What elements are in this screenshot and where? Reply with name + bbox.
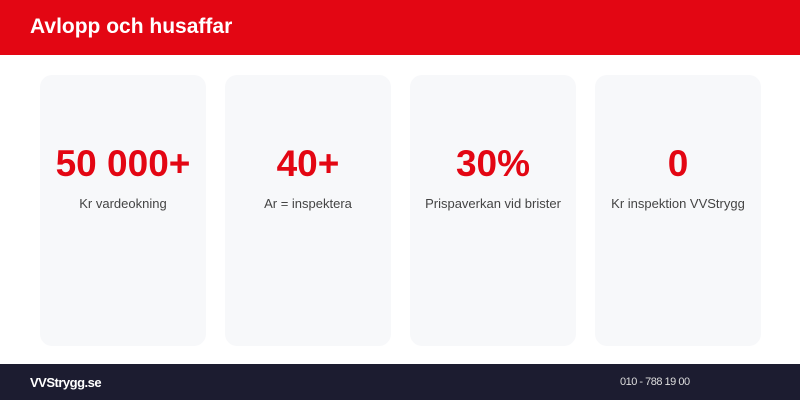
card: years: 40+ — [277, 143, 339, 184]
card: price impact — [410, 75, 576, 346]
card: value increase: 50 000+ — [56, 143, 190, 184]
card: years: Ar = inspektera — [264, 196, 352, 211]
footer phone: 010 - 788 19 00 — [620, 376, 690, 388]
card: inspection cost: Kr inspektion VVStrygg — [611, 196, 745, 211]
card: price impact: 30% — [456, 143, 530, 184]
card: years — [225, 75, 391, 346]
card: inspection cost — [595, 75, 761, 346]
footer brand: VVStrygg.se — [30, 375, 101, 390]
footer — [0, 364, 800, 400]
card: value increase — [40, 75, 206, 346]
card: value increase: Kr vardeokning — [79, 196, 167, 211]
header bar — [0, 0, 800, 55]
card: price impact: Prispaverkan vid brister — [425, 196, 561, 211]
card: inspection cost: 0 — [668, 143, 688, 184]
title: Avlopp och husaffar — [30, 15, 232, 38]
